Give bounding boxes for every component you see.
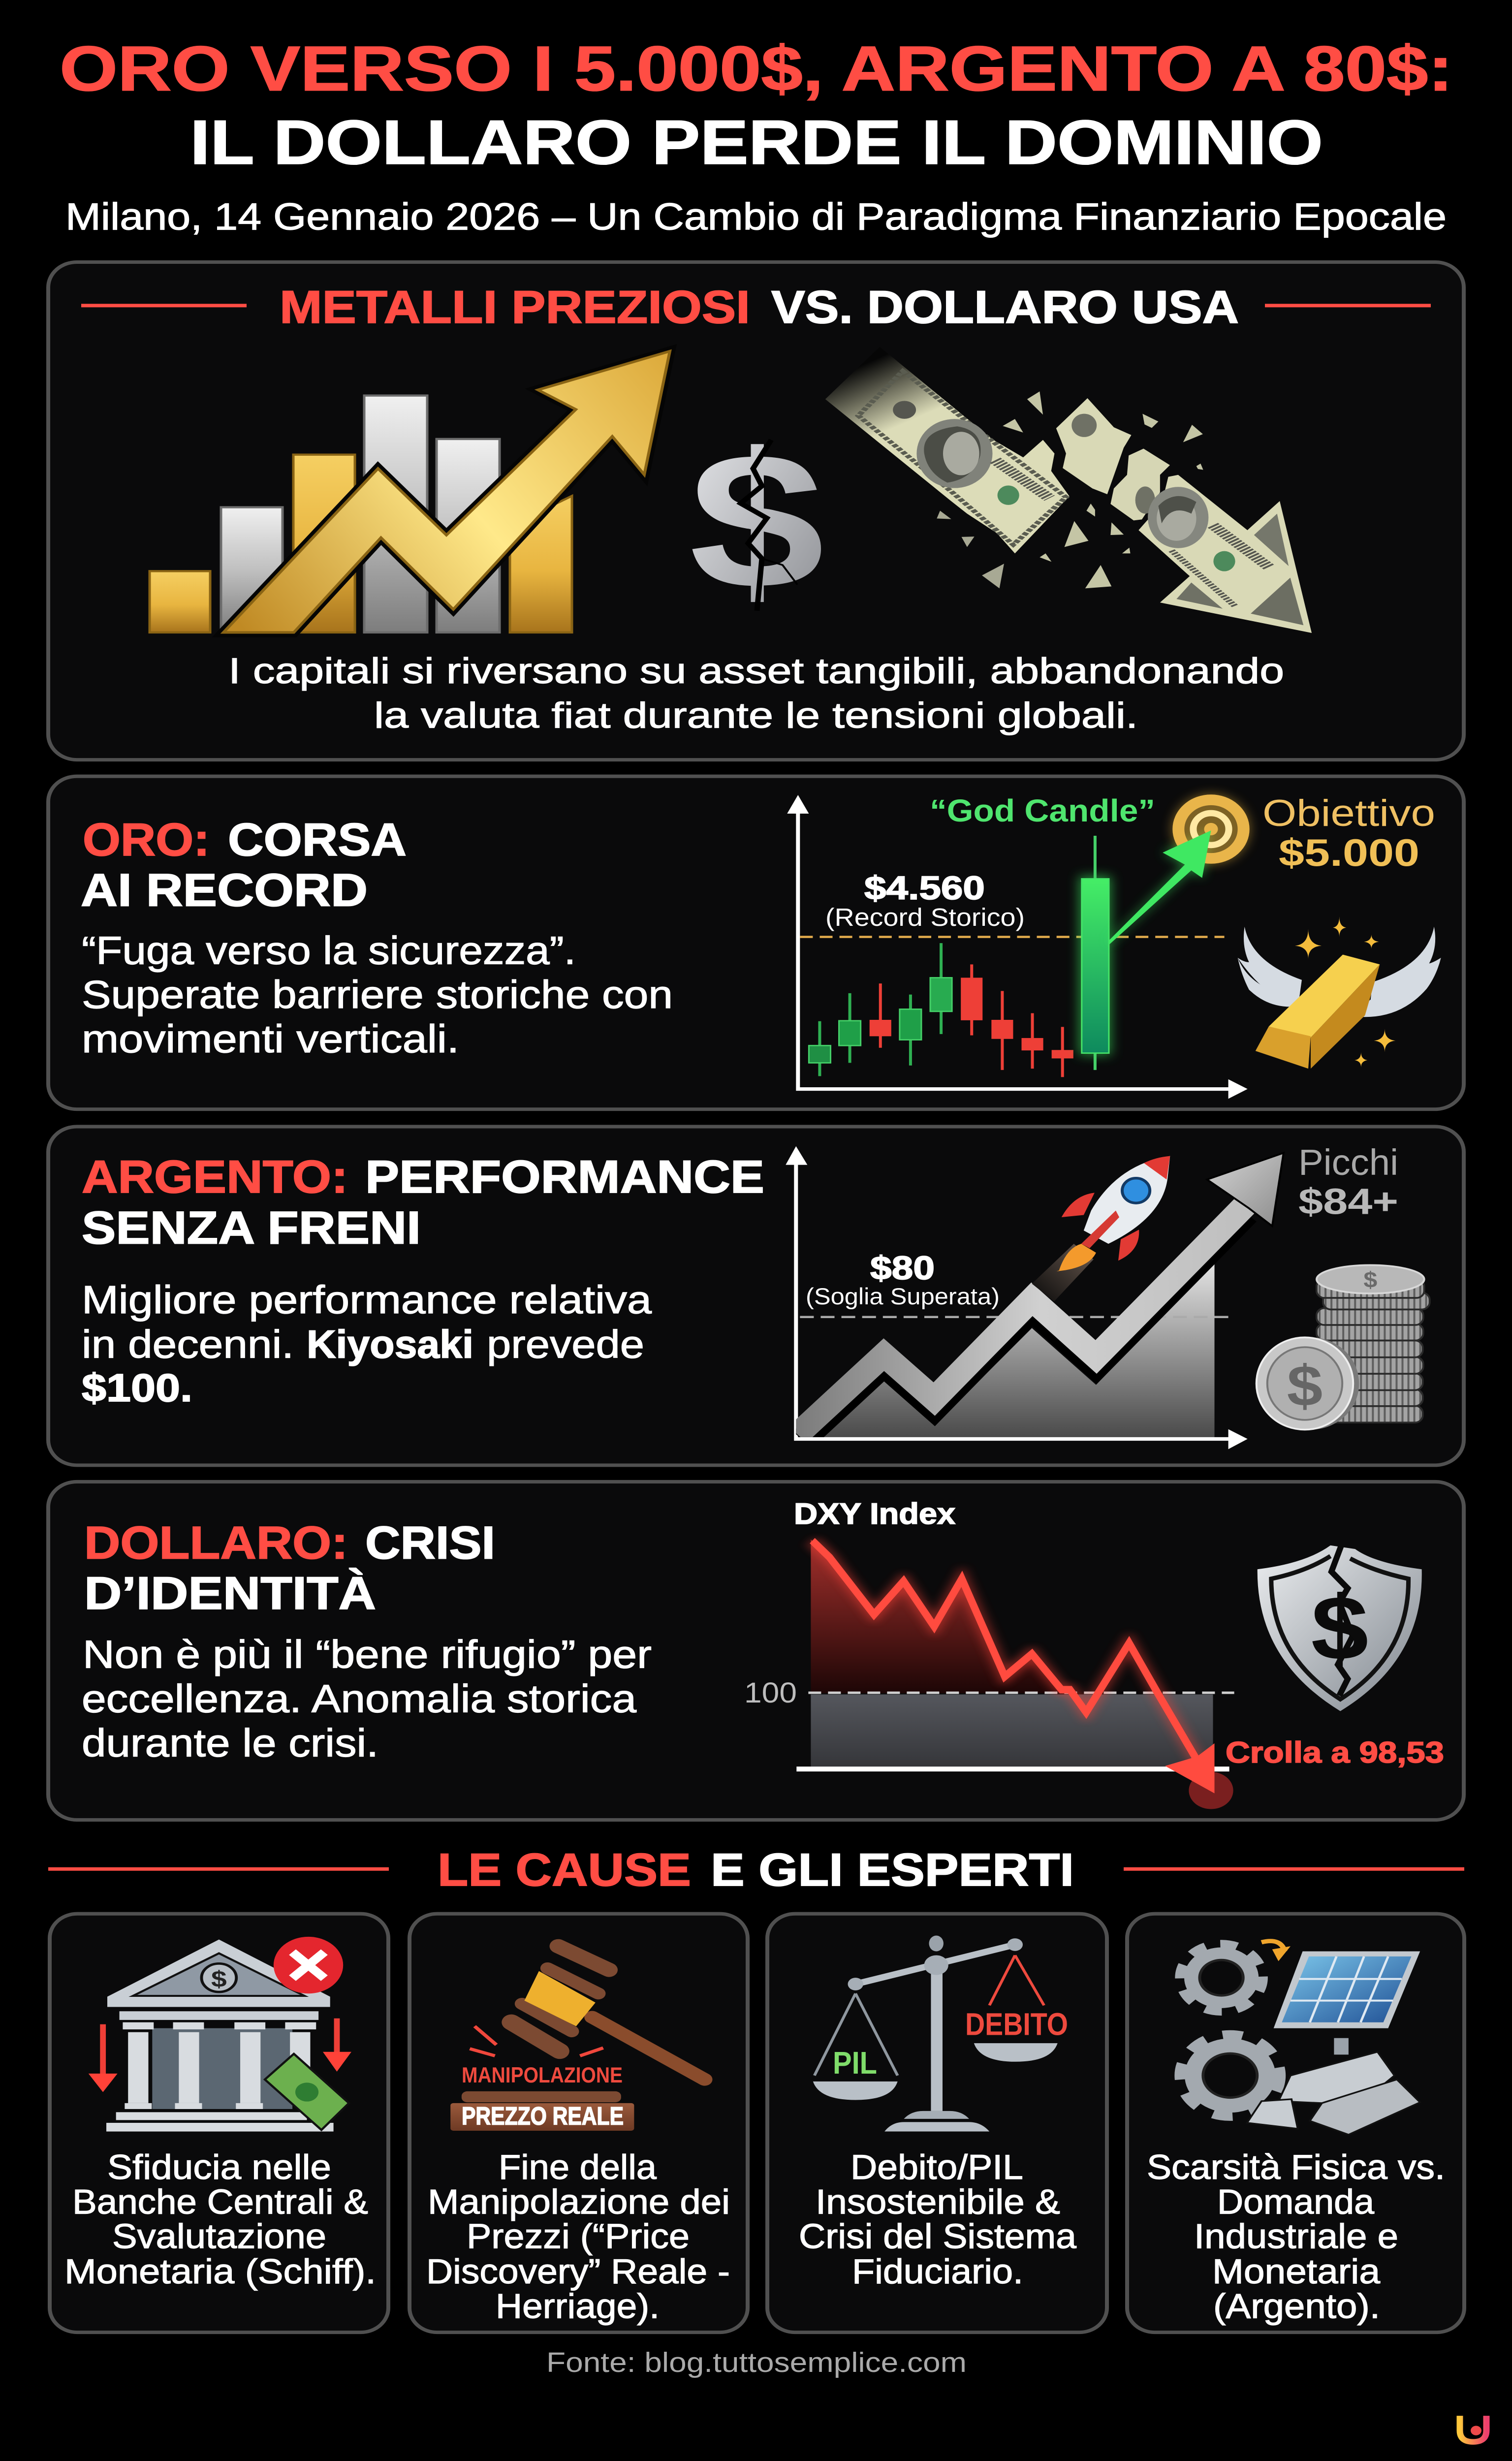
chart labels: oro: [825, 792, 1435, 931]
panel heading: VS. DOLLARO USA: [771, 282, 1239, 333]
chart labels: dollaro: DXY Index: [794, 1497, 955, 1530]
chart labels: argento: $84+: [1298, 1181, 1398, 1222]
icon: gears, solar panel and silver bars: [1182, 1941, 1420, 2135]
card text: Fine della: [499, 2147, 657, 2186]
card: manipolazione: [410, 1914, 748, 2333]
card text: Domanda: [1217, 2182, 1374, 2221]
icon: gavel: [450, 1946, 705, 2131]
card text: Sfiducia nelle: [107, 2147, 331, 2186]
text block: argento: Kiyosaki: [307, 1323, 473, 1366]
panel caption: la valuta fiat durante le tensioni globali.: [374, 695, 1138, 735]
panel: metalli preziosi vs dollaro: [48, 262, 1464, 760]
card text: Scarsità Fisica vs.: [1147, 2147, 1445, 2186]
card text: Svalutazione: [112, 2217, 326, 2255]
text block: oro: Superate barriere storiche con: [82, 973, 673, 1016]
text block: oro: movimenti verticali.: [82, 1017, 459, 1061]
panel heading: dollaro: [84, 1517, 495, 1619]
text block: oro: “Fuga verso la sicurezza”.: [82, 929, 576, 973]
text block: argento: $100.: [82, 1366, 192, 1410]
panel heading: argento: PERFORMANCE: [365, 1151, 764, 1203]
panel heading: [81, 282, 1431, 333]
text block: argento: in decenni.: [82, 1323, 294, 1366]
card text: Industriale e: [1194, 2217, 1398, 2255]
gavel labels: [462, 2063, 624, 2130]
text block: dollaro: durante le crisi.: [82, 1721, 378, 1765]
text block: dollaro: eccellenza. Anomalia storica: [82, 1676, 637, 1720]
card text: [426, 2147, 730, 2325]
icon: winged gold bar: [1238, 916, 1441, 1069]
chart labels: oro: (Record Storico): [825, 903, 1025, 931]
card text: [799, 2147, 1076, 2291]
card text: Insostenibile &: [816, 2182, 1060, 2221]
card: debito pil: [767, 1914, 1107, 2333]
panel heading: argento: SENZA FRENI: [82, 1202, 421, 1254]
icon: logo: [1460, 2416, 1486, 2442]
source line: Fonte: blog.tuttosemplice.com: [546, 2346, 967, 2378]
card: banche centrali: [50, 1914, 388, 2333]
text block: oro: [82, 929, 673, 1061]
card: scarsita fisica: [1127, 1914, 1464, 2333]
icon: cracked dollar shield: [1258, 1546, 1422, 1711]
card text: (Argento).: [1213, 2287, 1380, 2325]
chart labels: oro: $5.000: [1279, 831, 1419, 874]
card text: Fiduciario.: [852, 2252, 1023, 2291]
text block: argento: Migliore performance relativa: [82, 1278, 652, 1322]
text block: dollaro: [82, 1632, 652, 1765]
subtitle: Milano, 14 Gennaio 2026 – Un Cambio di Paradigma Finanziario Epocale: [65, 196, 1447, 238]
chart labels: dollaro: 100: [744, 1677, 797, 1709]
panel heading: argento: [82, 1151, 764, 1254]
panel: argento: [48, 1127, 1464, 1465]
section heading: le cause e gli esperti: [48, 1844, 1464, 1895]
candlestick chart: [787, 794, 1250, 1099]
icon: gold and silver bar chart with rising arrow: [150, 351, 670, 632]
chart labels: dollaro: [744, 1497, 1444, 1769]
icon: balance scale: [813, 1935, 1058, 2132]
title: [60, 33, 1453, 177]
icon: silver coin stack: [1257, 1265, 1430, 1430]
icon: bank with red x: [89, 1937, 351, 2132]
icon: bank with red x: $: [211, 1966, 227, 1992]
section heading: le cause e gli esperti: LE CAUSE: [438, 1844, 691, 1895]
icon: rocket: [1032, 1156, 1170, 1301]
panel heading: METALLI PREZIOSI: [280, 282, 750, 333]
icon: shattered banknote arrow: [825, 347, 1312, 633]
panel: dollaro: [48, 1482, 1464, 1820]
card text: Monetaria: [1212, 2252, 1380, 2291]
card text: Monetaria (Schiff).: [64, 2252, 376, 2291]
card text: [1147, 2147, 1445, 2325]
card text: Banche Centrali &: [72, 2182, 368, 2221]
icon: cracked dollar shield: $: [1311, 1577, 1368, 1679]
icon: silver coin stack: $: [1287, 1354, 1323, 1418]
panel heading: oro: AI RECORD: [81, 864, 368, 916]
card text: Debito/PIL: [850, 2147, 1023, 2186]
card text: [64, 2147, 376, 2291]
card text: Herriage).: [496, 2287, 660, 2325]
scale labels: [833, 2007, 1068, 2081]
scale labels: DEBITO: [965, 2007, 1068, 2042]
text block: dollaro: Non è più il “bene rifugio” per: [83, 1632, 652, 1676]
text block: argento: prevede: [487, 1323, 644, 1366]
panel heading: dollaro: DOLLARO:: [84, 1517, 348, 1569]
panel heading: dollaro: CRISI: [365, 1517, 495, 1569]
card text: Manipolazione dei: [428, 2182, 730, 2221]
panel heading: dollaro: D’IDENTITÀ: [84, 1568, 376, 1619]
title: IL DOLLARO PERDE IL DOMINIO: [190, 107, 1323, 177]
gavel labels: MANIPOLAZIONE: [462, 2063, 623, 2087]
chart labels: argento: [806, 1142, 1398, 1309]
panel heading: oro: [81, 814, 407, 916]
panel heading: argento: ARGENTO:: [82, 1151, 348, 1203]
card text: Discovery” Reale -: [426, 2252, 730, 2291]
scale labels: PIL: [833, 2046, 877, 2081]
panel: oro: [48, 776, 1464, 1109]
panel heading: oro: ORO:: [83, 814, 210, 865]
panel heading: oro: CORSA: [228, 814, 407, 865]
chart labels: oro: “God Candle”: [930, 794, 1155, 828]
title: ORO VERSO I 5.000$, ARGENTO A 80$:: [60, 33, 1453, 104]
gavel labels: PREZZO REALE: [462, 2102, 624, 2130]
chart labels: argento: $80: [870, 1250, 935, 1287]
icon: silver coin stack: $: [1363, 1268, 1377, 1293]
section heading: le cause e gli esperti: E GLI ESPERTI: [711, 1844, 1074, 1895]
icon: cracked dollar sign: $: [689, 412, 824, 629]
silver area chart with rising arrow: [786, 1146, 1284, 1449]
card text: Crisi del Sistema: [799, 2217, 1076, 2255]
chart labels: argento: (Soglia Superata): [806, 1283, 1000, 1309]
panel caption: [228, 651, 1284, 735]
DXY line chart: [796, 1540, 1234, 1809]
chart labels: dollaro: Crolla a 98,53: [1226, 1736, 1444, 1769]
chart labels: argento: Picchi: [1298, 1142, 1398, 1183]
chart labels: oro: $4.560: [864, 870, 985, 907]
card text: Prezzi (“Price: [467, 2217, 690, 2255]
panel caption: I capitali si riversano su asset tangibili, abbandonando: [228, 651, 1284, 691]
chart labels: oro: Obiettivo: [1262, 792, 1435, 834]
text block: argento: [82, 1278, 652, 1410]
